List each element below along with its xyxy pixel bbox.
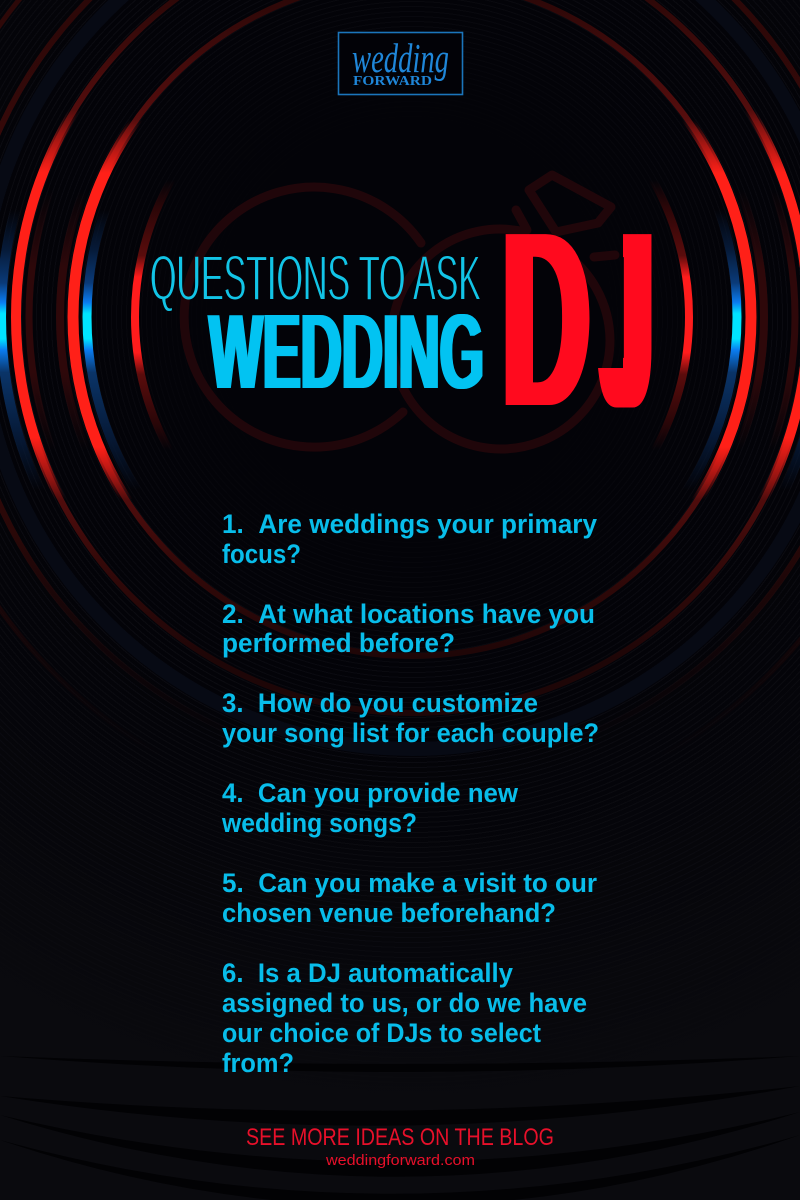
- icon: wedding rings watermark: [184, 175, 615, 449]
- question 4: wedding songs?: [221, 808, 417, 838]
- question 6: our choice of DJs to select: [222, 1018, 541, 1048]
- question 6: assigned to us, or do we have: [222, 988, 587, 1018]
- question 6: [222, 958, 587, 1078]
- logo: wedding forward: wedding: [352, 35, 449, 81]
- question 3: 3. How do you customize: [222, 688, 538, 718]
- question 2: [222, 599, 595, 658]
- question 1: [222, 509, 597, 569]
- footer call to action: [246, 1124, 554, 1169]
- question 3: [222, 688, 599, 748]
- text: J: [604, 176, 649, 463]
- question 1: focus?: [222, 539, 301, 569]
- bottom dark wave bands: [0, 1056, 800, 1200]
- footer call to action: SEE MORE IDEAS ON THE BLOG: [246, 1124, 554, 1151]
- title: [152, 234, 652, 408]
- question 4: 4. Can you provide new: [222, 778, 518, 808]
- question 2: 2. At what locations have you: [222, 599, 595, 629]
- concentric speaker rings: [0, 0, 800, 822]
- question 6: from?: [222, 1048, 294, 1078]
- question 1: 1. Are weddings your primary: [222, 509, 597, 539]
- question list: [221, 509, 599, 1078]
- logo: wedding forward: [338, 32, 462, 94]
- question 5: 5. Can you make a visit to our: [222, 868, 597, 898]
- question 6: 6. Is a DJ automatically: [222, 958, 513, 988]
- footer call to action: weddingforward.com: [325, 1152, 475, 1169]
- question 4: [221, 778, 518, 838]
- question 5: chosen venue beforehand?: [222, 898, 556, 928]
- question 3: your song list for each couple?: [222, 718, 599, 748]
- question 5: [222, 868, 597, 928]
- logo: wedding forward: FORWARD: [353, 73, 432, 88]
- heading: questions to ask: QUESTIONS TO ASK: [150, 242, 481, 314]
- question 2: performed before?: [222, 628, 455, 658]
- title: D: [503, 176, 590, 463]
- heading: wedding: WEDDING: [209, 291, 484, 413]
